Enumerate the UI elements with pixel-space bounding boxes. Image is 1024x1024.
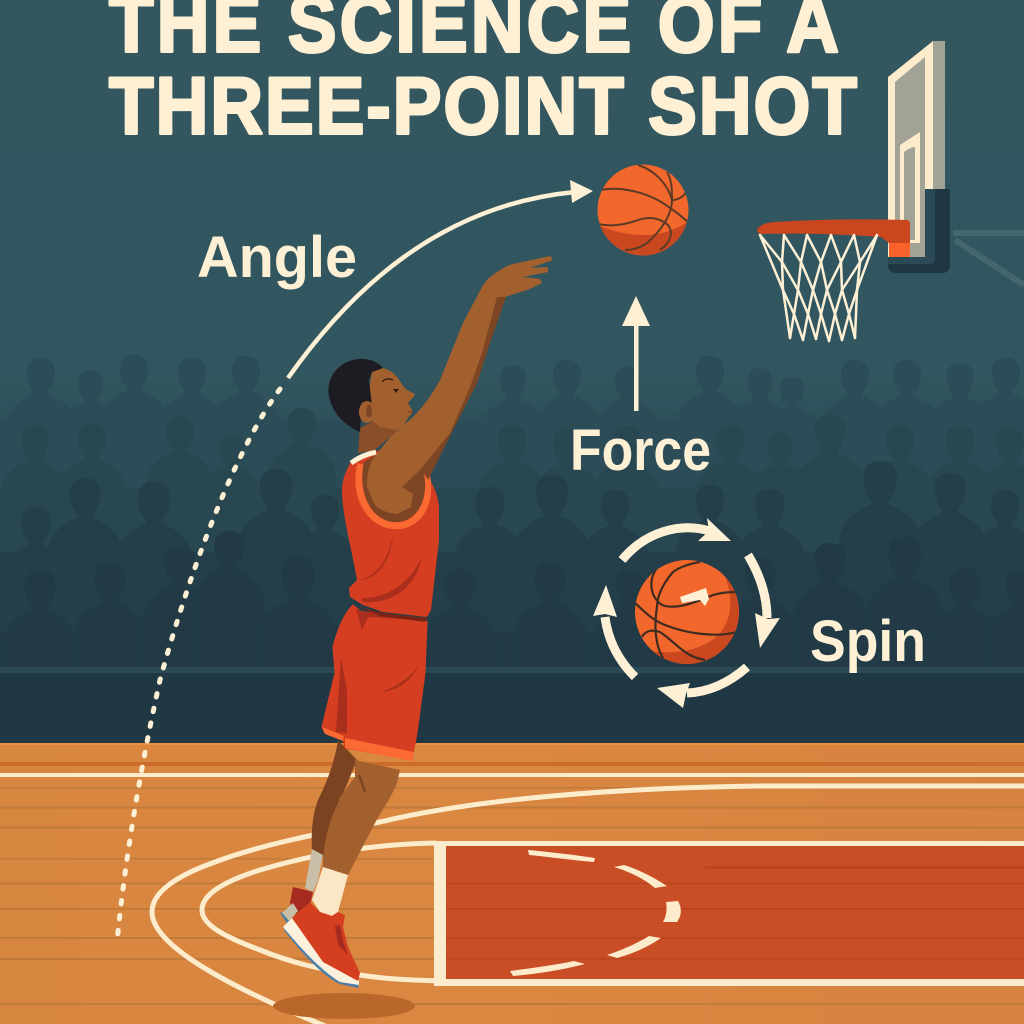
front shoe	[283, 902, 360, 988]
title	[109, 0, 857, 151]
angle trajectory solid arc with arrow	[288, 180, 593, 378]
dashed key arc	[510, 850, 681, 976]
free-throw arc	[202, 843, 440, 981]
front leg	[323, 760, 400, 875]
label: Angle: Angle	[197, 225, 357, 290]
hair	[328, 359, 383, 432]
spin ball	[635, 560, 739, 664]
label: Force: Force	[570, 418, 711, 483]
armhole trim	[359, 464, 428, 526]
back shoe	[281, 887, 313, 924]
backboard and hoop	[757, 41, 950, 273]
title: THREE-POINT SHOT	[109, 61, 857, 151]
spin rotation arrows	[593, 518, 780, 708]
front sock	[312, 867, 348, 916]
painted key	[434, 841, 1024, 986]
ear	[359, 401, 375, 423]
neck	[358, 415, 400, 453]
arena wall background	[0, 0, 1024, 743]
lower wall band	[0, 667, 1024, 743]
hand	[482, 256, 553, 297]
shorts	[322, 605, 427, 761]
court floor	[0, 743, 1024, 1024]
player	[281, 256, 553, 988]
angle trajectory dotted path	[117, 389, 280, 942]
back leg	[312, 740, 357, 858]
three-point line	[152, 786, 1024, 1024]
shadow under player	[273, 993, 415, 1019]
force arrow	[622, 296, 650, 411]
label: Spin: Spin	[810, 609, 926, 674]
faint court line behind hoop	[953, 233, 1024, 285]
raised arm	[367, 287, 497, 514]
basketball at top of arc	[598, 164, 690, 260]
jersey	[342, 450, 439, 622]
raised arm shadow side	[362, 296, 506, 522]
crowd silhouettes	[0, 355, 1024, 940]
net	[760, 235, 877, 341]
back sock	[305, 849, 323, 892]
face	[365, 368, 415, 430]
